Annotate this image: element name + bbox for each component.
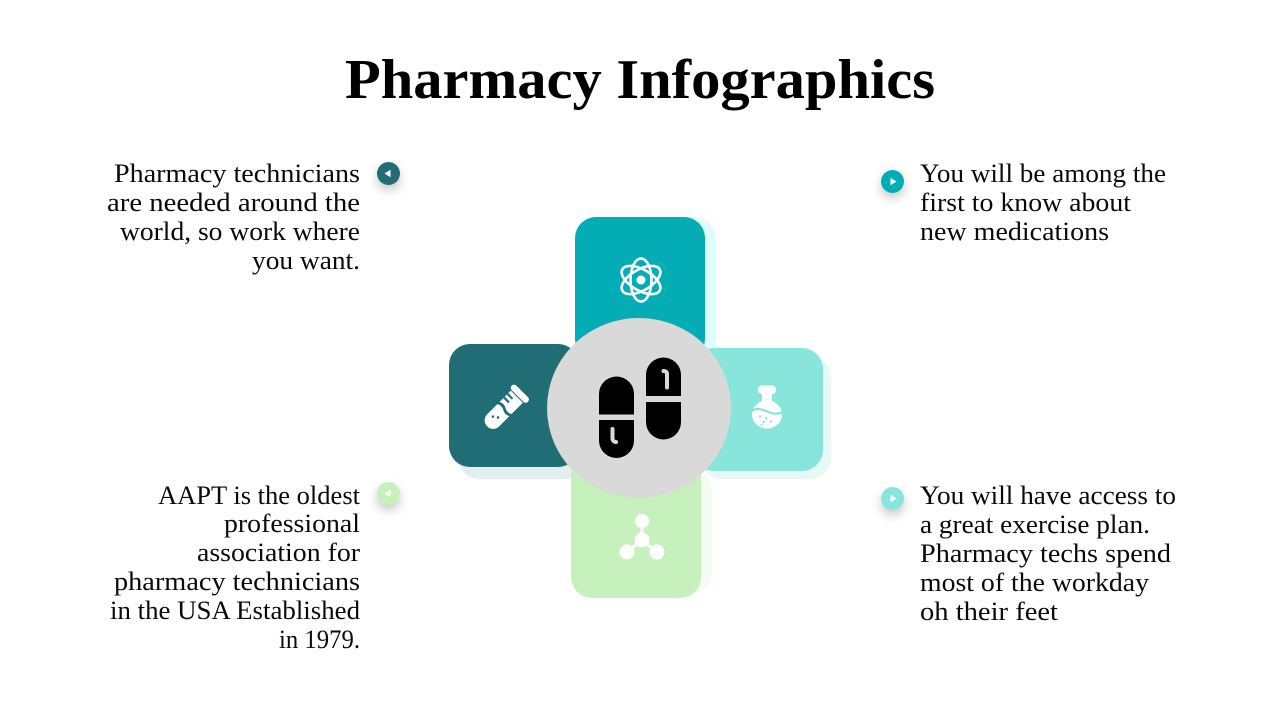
panel: bottom arm: [571, 455, 701, 598]
icon: test tube: [479, 383, 530, 435]
panel: left arm shadow: [458, 356, 588, 479]
text block: bottom right: a great exercise plan.: [920, 510, 1150, 539]
panel: left arm: [449, 344, 579, 467]
icon: molecule: [620, 514, 664, 560]
text block: bottom left: pharmacy technicians: [114, 567, 360, 596]
text block: bottom left: AAPT is the oldest: [158, 481, 361, 510]
text block: top left: are needed around the: [107, 188, 360, 217]
panel: right arm: [693, 348, 823, 471]
panel: right arm shadow: [700, 356, 831, 479]
bullet: top right: [881, 170, 904, 193]
text block: bottom left: [110, 481, 361, 654]
panel: bottom arm shadow: [582, 470, 712, 593]
bullet: bottom right: [881, 487, 904, 510]
title: Pharmacy Infographics: [345, 49, 935, 111]
text block: bottom left: professional: [224, 509, 360, 538]
text block: bottom right: Pharmacy techs spend: [920, 539, 1171, 568]
text block: bottom right: [920, 481, 1176, 626]
bullet: top left: [377, 162, 400, 185]
text block: top left: you want.: [252, 246, 360, 275]
text block: bottom right: oh their feet: [920, 597, 1059, 626]
text block: bottom right: most of the workday: [920, 568, 1149, 597]
text block: top right: new medications: [920, 217, 1109, 246]
text block: bottom left: in the USA Established: [110, 596, 360, 625]
central circle: [547, 318, 731, 498]
icon: atom: [617, 258, 665, 302]
icon: capsules: [599, 358, 681, 458]
text block: bottom right: You will have access to: [920, 481, 1176, 510]
text block: top right: [920, 159, 1166, 246]
text block: top left: [107, 159, 360, 275]
panel: top arm shadow: [586, 217, 716, 360]
bullet: bottom left: [377, 482, 400, 505]
text block: top right: You will be among the: [920, 159, 1166, 188]
text block: bottom left: in 1979.: [279, 625, 360, 654]
text block: top left: Pharmacy technicians: [114, 159, 360, 188]
text block: top left: world, so work where: [120, 217, 360, 246]
text block: bottom left: association for: [197, 538, 360, 567]
text block: top right: first to know about: [920, 188, 1132, 217]
panel: top arm: [575, 217, 705, 360]
icon: flask: [751, 386, 783, 428]
